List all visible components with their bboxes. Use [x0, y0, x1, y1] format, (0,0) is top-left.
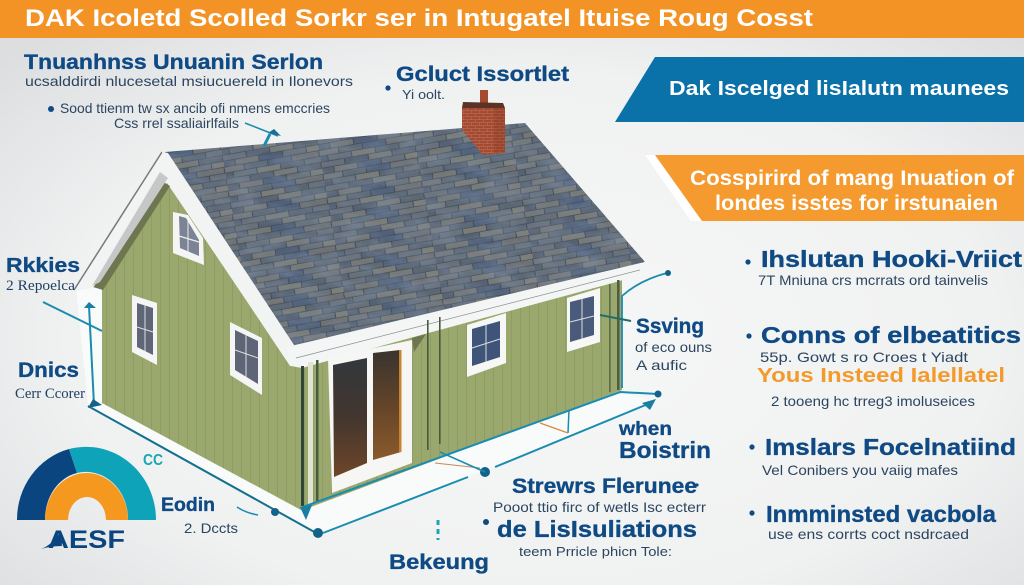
list item 1: Ihslutan Hooki-Vriict — [761, 246, 1022, 272]
label: when: when — [618, 419, 672, 440]
label: when: Boistrin — [619, 437, 711, 463]
header bar with title — [0, 0, 1024, 38]
list item 3 — [749, 434, 1016, 478]
label: Bekeung: Bekeung — [389, 551, 489, 574]
orange banner — [645, 155, 1024, 221]
label: when — [618, 419, 711, 463]
blue banner: Dak Iscelged lisIalutn maunees — [669, 78, 1009, 100]
text block: top left intro: Sood ttienm tw sx ancib ofi nmens emccries — [60, 100, 330, 116]
list item 1 — [745, 246, 1022, 288]
list item 2 — [746, 322, 1021, 409]
chimney — [462, 90, 505, 155]
text block: top centre callout — [385, 63, 569, 102]
label: bottom left: Eodin — [161, 495, 215, 516]
house illustration — [73, 90, 655, 535]
label: left top: Rkkies — [6, 255, 80, 277]
blue banner — [615, 57, 1024, 122]
label: left middle: Dnics — [18, 359, 79, 382]
label: bottom left: 2. Dccts — [184, 520, 238, 536]
list item 4 — [749, 501, 996, 542]
list item 3: Vel Conibers you vaiig mafes — [762, 462, 958, 478]
text block: bottom centre: Pooot ttio firc of wetls Isc ecterr — [493, 499, 706, 515]
text block: top centre callout: Gcluct Issortlet — [396, 63, 569, 86]
front fascia — [287, 262, 645, 368]
label: saving: of eco ouns — [635, 339, 712, 355]
sliding door — [328, 340, 412, 493]
label: left middle — [15, 359, 85, 402]
list item 3: Imslars Focelnatiind — [765, 434, 1016, 460]
gable left trim — [73, 152, 172, 291]
list item 2: 2 tooeng hc trreg3 imoluseices — [771, 393, 975, 409]
label: left top — [6, 255, 80, 294]
list item 1: 7T Mniuna crs mcrrats ord tainvelis — [758, 272, 988, 288]
label: bottom left — [161, 495, 238, 536]
logo: semicircle gauge with AESF — [17, 447, 156, 554]
logo: semicircle gauge with AESF: AESF — [48, 526, 125, 554]
text block: top centre callout: Yi oolt. — [402, 87, 445, 102]
gable right trim — [162, 152, 302, 366]
line: right vertical measure — [600, 270, 671, 388]
window: gable middle — [132, 295, 157, 365]
arrow: roof pointer — [245, 123, 281, 146]
window: front left — [467, 313, 506, 377]
list item 2: Yous Insteed Ialellatel — [757, 365, 1005, 387]
line: left base — [88, 406, 323, 538]
window: gable right — [230, 322, 262, 395]
text block: top left intro: Css rrel ssaliairlfails — [114, 115, 239, 131]
text block: bottom centre: Strewrs Flerunee — [512, 475, 697, 498]
text block: bottom centre: de LisIsuliations — [497, 516, 697, 542]
header bar with title: DAK Icoletd Scolled Sorkr ser in Intugatel Ituise Roug Cosst — [25, 5, 813, 32]
text block: top left intro: Tnuanhnss Unuanin Serlon — [24, 51, 323, 74]
line: front base — [300, 390, 662, 533]
label: saving — [635, 315, 712, 373]
orange banner: londes isstes for irstunaien — [715, 192, 998, 215]
arrow: left vertical measure — [43, 302, 102, 408]
window: front right — [567, 288, 600, 352]
right list — [745, 246, 1022, 542]
text block: top left intro: ucsalddirdi nlucesetal msiucuereld in Ilonevors — [25, 73, 353, 89]
label: CC: CC — [143, 452, 163, 469]
orange banner: Cosspirird of mang Inuation of — [690, 167, 1015, 190]
list item 4: use ens corrts coct nsdrcaed — [768, 526, 969, 542]
label: left top: 2 Repoelca — [6, 278, 75, 294]
dimension lines and arrows — [43, 123, 671, 540]
text block: top left intro — [24, 51, 353, 131]
window: gable top — [173, 212, 204, 265]
front wall — [290, 278, 622, 510]
list item 4: Inmminsted vacbola — [766, 501, 996, 527]
label: saving: Ssving — [636, 315, 704, 338]
line: small measures — [435, 410, 569, 540]
label: left middle: Cerr Ccorer — [15, 386, 85, 402]
roof surface — [165, 123, 645, 347]
gable wall — [102, 183, 303, 511]
ground strip — [76, 283, 655, 535]
gable soffit shadow — [93, 180, 170, 290]
list item 2: 55p. Gowt s ro Croes t Yiadt — [760, 349, 968, 365]
label: saving: A aufic — [636, 357, 687, 373]
text block: bottom centre — [483, 475, 706, 559]
list item 2: Conns of elbeatitics — [761, 322, 1021, 348]
text block: bottom centre: teem Prricle phicn Tole: — [519, 544, 672, 559]
downspouts — [301, 366, 304, 506]
